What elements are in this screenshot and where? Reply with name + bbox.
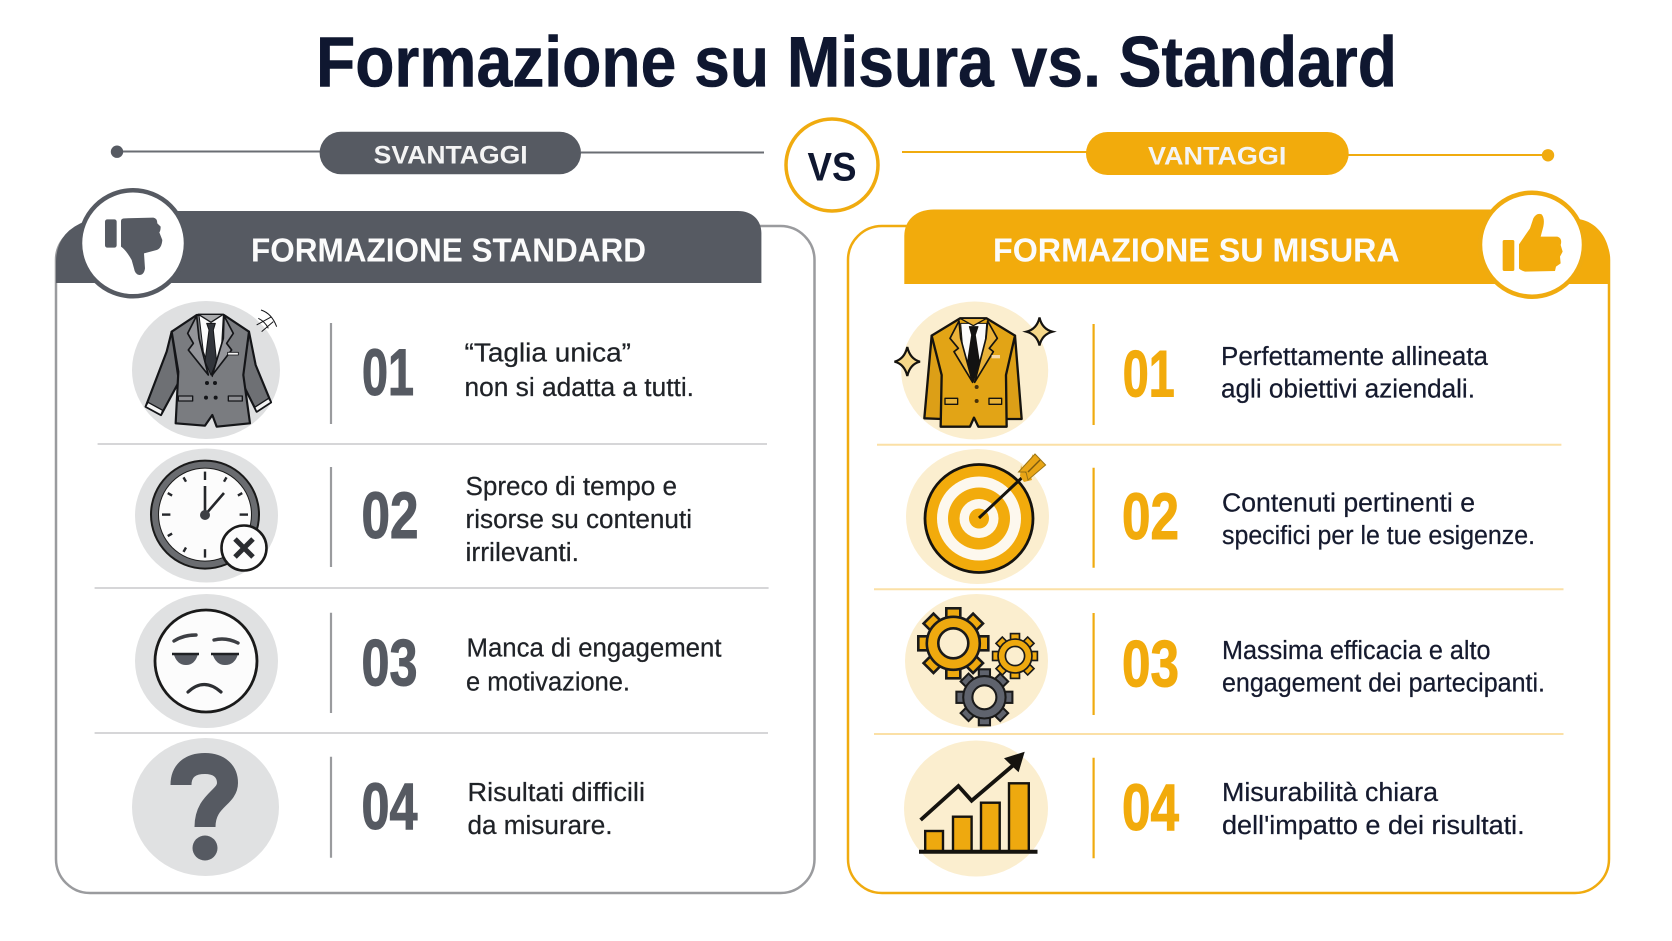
row 4: misurabilita: 04 bbox=[1122, 770, 1179, 844]
text: row 2: Contenuti pertinenti e bbox=[1222, 490, 1475, 518]
row 4: risultati difficili bbox=[132, 738, 645, 876]
icon: thumbs up bbox=[1480, 193, 1584, 297]
row 2: spreco di tempo bbox=[135, 448, 692, 582]
row 4: misurabilita bbox=[904, 740, 1525, 876]
row 2: spreco di tempo: 02 bbox=[362, 478, 418, 552]
text: row 4: Misurabilità chiara bbox=[1222, 779, 1439, 807]
text: row 1: agli obiettivi aziendali. bbox=[1221, 376, 1475, 404]
row 3: manca di engagement bbox=[135, 594, 722, 728]
svantaggi label with connector bbox=[111, 132, 764, 174]
text: row 4: da misurare. bbox=[468, 812, 612, 840]
text: row 1: Perfettamente allineata bbox=[1221, 343, 1489, 371]
row 1: allineata: 01 bbox=[1123, 336, 1175, 410]
text: row 4: Risultati difficili bbox=[468, 779, 645, 807]
row 2: contenuti pertinenti: 02 bbox=[1122, 479, 1179, 553]
row 3: massima efficacia bbox=[905, 594, 1545, 728]
text: row 3: Manca di engagement bbox=[466, 635, 722, 663]
vantaggi label with connector bbox=[902, 132, 1554, 175]
vs badge: VS bbox=[808, 146, 856, 190]
header: formazione su misura bbox=[904, 210, 1610, 284]
text: row 1: non si adatta a tutti. bbox=[464, 374, 694, 402]
title: Formazione su Misura vs. Standard bbox=[316, 24, 1397, 103]
row 2: contenuti pertinenti bbox=[906, 449, 1535, 584]
text: row 2: Spreco di tempo e bbox=[466, 473, 677, 501]
text: row 2: irrilevanti. bbox=[466, 539, 579, 567]
text: row 2: specifici per le tue esigenze. bbox=[1222, 522, 1535, 550]
row 1: allineata bbox=[894, 302, 1489, 440]
header: formazione su misura: FORMAZIONE SU MISURA bbox=[993, 232, 1400, 268]
row 4: risultati difficili: 04 bbox=[362, 769, 418, 843]
text: row 3: e motivazione. bbox=[466, 669, 630, 697]
row 3: manca di engagement: 03 bbox=[362, 626, 418, 700]
icon: grey jacket bbox=[132, 301, 280, 439]
text: row 3: engagement dei partecipanti. bbox=[1222, 670, 1545, 698]
text: row 1: “Taglia unica” bbox=[464, 340, 631, 368]
svantaggi label with connector: SVANTAGGI bbox=[374, 141, 528, 169]
panel: formazione standard bbox=[56, 190, 814, 893]
header: formazione standard: FORMAZIONE STANDARD bbox=[251, 232, 646, 268]
icon: growth chart bbox=[904, 740, 1048, 876]
icon: gold jacket with sparkles bbox=[894, 302, 1052, 440]
icon: gears bbox=[905, 594, 1048, 728]
text: row 2: risorse su contenuti bbox=[466, 506, 692, 534]
text: row 3: Massima efficacia e alto bbox=[1222, 637, 1490, 665]
panel: formazione su misura bbox=[848, 193, 1610, 893]
text: row 4: dell'impatto e dei risultati. bbox=[1222, 812, 1525, 840]
row 1: taglia unica bbox=[132, 301, 694, 439]
icon: target with arrow bbox=[906, 449, 1049, 584]
icon: clock with cross bbox=[135, 448, 278, 582]
vs badge bbox=[786, 119, 878, 211]
row 3: massima efficacia: 03 bbox=[1122, 626, 1179, 700]
icon: thumbs down bbox=[80, 190, 186, 296]
icon: question mark bbox=[132, 738, 279, 876]
vantaggi label with connector: VANTAGGI bbox=[1148, 142, 1286, 170]
row 1: taglia unica: 01 bbox=[362, 335, 414, 409]
icon: bored face bbox=[135, 594, 278, 728]
header: formazione standard bbox=[56, 211, 761, 283]
